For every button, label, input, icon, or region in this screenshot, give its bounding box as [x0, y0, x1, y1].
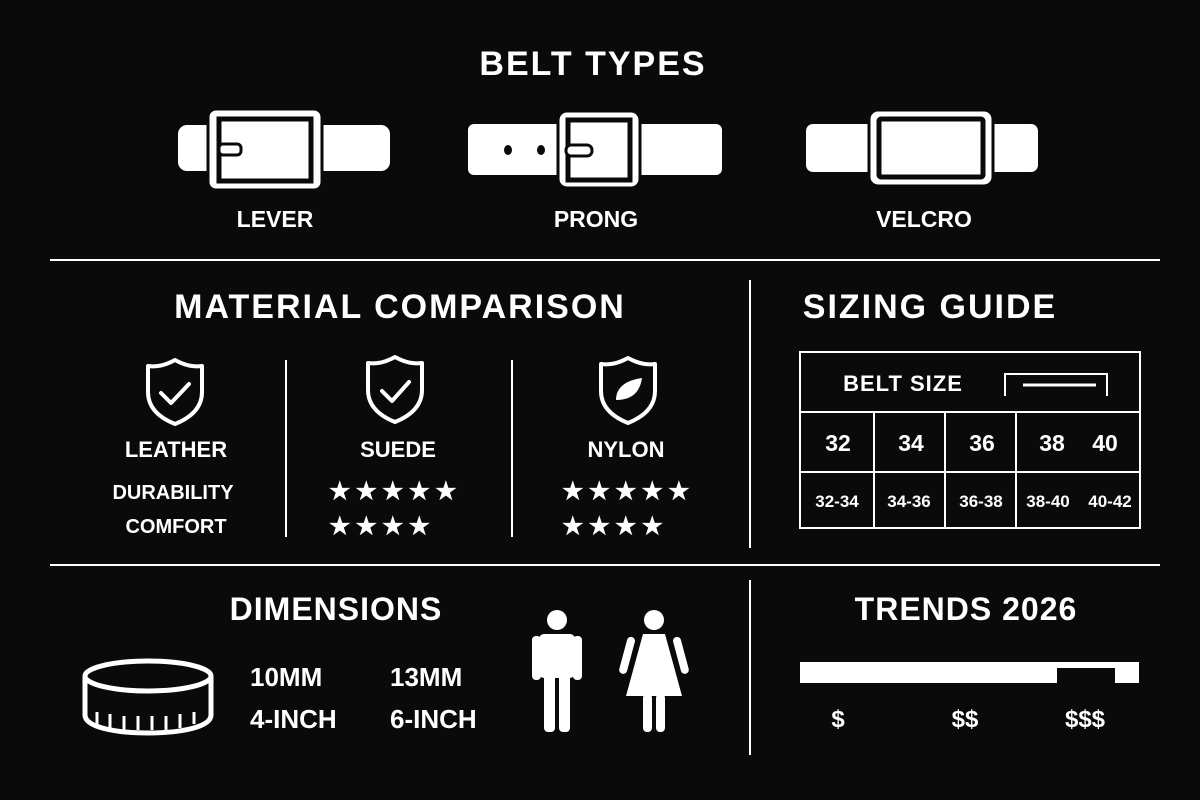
label: nylon: NYLON — [588, 437, 664, 462]
chart: price bar: $$$ — [1065, 706, 1106, 733]
title: BELT TYPES — [479, 45, 707, 83]
table: sizing guide: 40 — [1092, 430, 1118, 456]
heading: material comparison: MATERIAL COMPARISON — [174, 288, 626, 326]
table: sizing guide: 38-40 — [1026, 492, 1070, 511]
heading: sizing guide: SIZING GUIDE — [803, 288, 1057, 326]
label: prong: PRONG — [554, 206, 638, 232]
table: sizing guide: 36-38 — [959, 492, 1003, 511]
table: sizing guide: 34-36 — [887, 492, 931, 511]
table: sizing guide: 34 — [898, 430, 924, 456]
chart: price bar — [800, 662, 1139, 733]
icon: prong belt — [468, 111, 722, 188]
icon: suede shield — [368, 357, 422, 422]
text: dimensions values — [250, 662, 477, 734]
table: sizing guide: 40-42 — [1088, 492, 1132, 511]
panel: material comparison — [112, 357, 695, 540]
text: dimensions values: 13MM — [390, 662, 462, 692]
icon: woman — [618, 610, 690, 732]
icon: leather shield — [148, 360, 202, 424]
table: sizing guide: 36 — [969, 430, 995, 456]
text: dimensions values: 10MM — [250, 662, 322, 692]
text: comfort: COMFORT — [125, 516, 227, 538]
table: sizing guide: 38 — [1039, 430, 1065, 456]
text: dimensions values: 4-INCH — [250, 704, 337, 734]
panel: material comparison: ★★★★ — [562, 513, 668, 540]
label: lever: LEVER — [237, 206, 314, 232]
icon: nylon shield — [601, 358, 655, 423]
table: sizing guide: BELT SIZE — [843, 371, 963, 396]
stars: suede: ★★★★★ — [329, 478, 462, 505]
heading: dimensions: DIMENSIONS — [230, 591, 442, 627]
icon: tape measure — [85, 661, 211, 733]
icon: velcro belt — [806, 110, 1038, 186]
table: sizing guide: 32-34 — [815, 492, 859, 511]
label: suede: SUEDE — [360, 437, 436, 462]
table: sizing guide — [800, 352, 1140, 528]
icon: lever belt — [178, 109, 390, 190]
chart: price bar: $$ — [952, 706, 979, 733]
label: leather: LEATHER — [125, 437, 227, 462]
text: durability: DURABILITY — [112, 482, 234, 504]
text: dimensions values: 6-INCH — [390, 704, 477, 734]
icon: man — [532, 610, 582, 732]
heading: trends 2026: TRENDS 2026 — [855, 591, 1077, 627]
panel: material comparison: ★★★★ — [329, 513, 435, 540]
chart: price bar: $ — [831, 706, 845, 733]
table: sizing guide: 32 — [825, 430, 851, 456]
stars: nylon: ★★★★★ — [562, 478, 695, 505]
label: velcro: VELCRO — [876, 206, 972, 232]
